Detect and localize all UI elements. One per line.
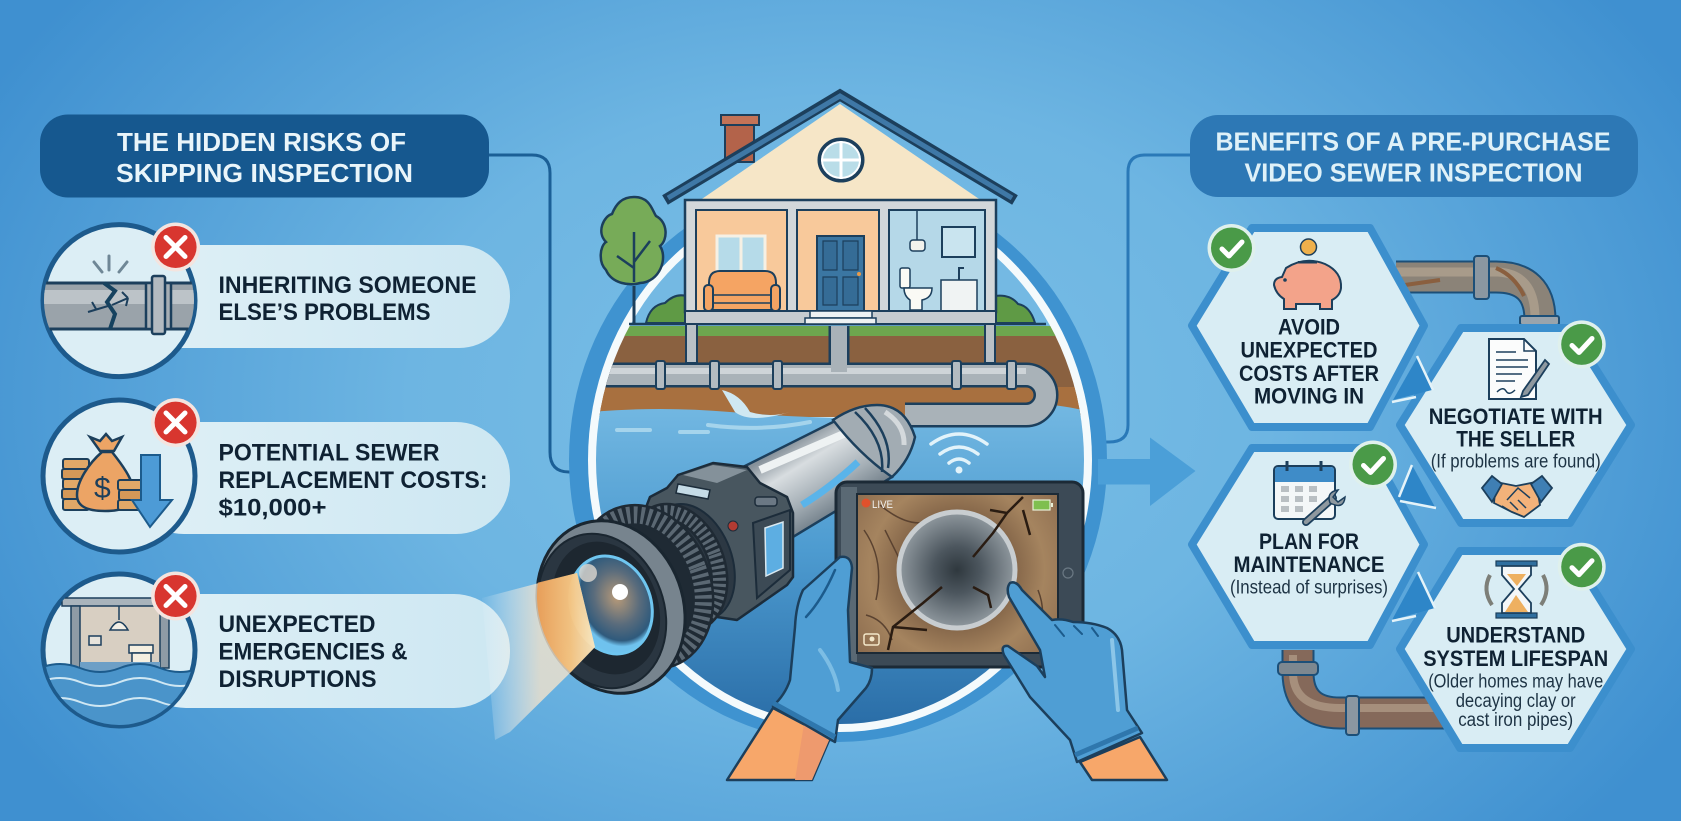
icon: red x badge bbox=[151, 398, 200, 447]
camera body bbox=[645, 463, 793, 620]
text: lifespan: (Older homes may have bbox=[1428, 672, 1603, 692]
icon: signed document bbox=[1489, 339, 1549, 399]
check badge bbox=[1558, 543, 1606, 591]
text: replacement costs bbox=[218, 440, 488, 522]
heading: hidden risks bbox=[40, 114, 489, 198]
rusty pipe: bottom bbox=[1278, 650, 1445, 735]
pipe interior bbox=[888, 497, 1030, 650]
text: inheriting problems: INHERITING SOMEONE bbox=[218, 272, 476, 299]
text: avoid costs: AVOID bbox=[1278, 314, 1340, 340]
text: plan maintenance: MAINTENANCE bbox=[1234, 552, 1384, 577]
icon: money bag and arrow bbox=[43, 400, 195, 552]
text: emergencies: EMERGENCIES & bbox=[218, 638, 408, 666]
arrow: negotiate to plan bbox=[1398, 465, 1436, 508]
ring bbox=[569, 178, 1107, 742]
text: plan maintenance bbox=[1230, 529, 1388, 598]
foundation posts bbox=[686, 324, 995, 363]
icon: cracked pipe bbox=[40, 225, 198, 377]
icon: money bag and arrow: $ bbox=[94, 472, 111, 505]
benefit: plan maintenance bbox=[1192, 440, 1424, 645]
text: avoid costs: MOVING IN bbox=[1254, 384, 1364, 408]
text: negotiate: (If problems are found) bbox=[1431, 452, 1601, 472]
sewer pipe bbox=[590, 326, 1046, 415]
ground line bbox=[629, 323, 1046, 325]
text: lifespan bbox=[1423, 622, 1608, 731]
text: negotiate: NEGOTIATE WITH bbox=[1429, 404, 1603, 429]
round window bbox=[820, 140, 862, 180]
arrow: to benefits bbox=[1098, 438, 1196, 506]
text: plan maintenance: (Instead of surprises) bbox=[1230, 578, 1388, 598]
left gloved hand bbox=[727, 557, 872, 780]
benefit: avoid costs bbox=[1192, 224, 1424, 427]
text: emergencies: UNEXPECTED bbox=[218, 611, 376, 638]
live indicator bbox=[862, 498, 893, 511]
text: avoid costs: COSTS AFTER bbox=[1239, 361, 1379, 386]
text: lifespan: UNDERSTAND bbox=[1446, 622, 1585, 648]
benefit: negotiate bbox=[1400, 320, 1631, 523]
text: avoid costs: UNEXPECTED bbox=[1240, 338, 1378, 362]
lens barrel bbox=[567, 492, 750, 676]
live indicator: LIVE bbox=[872, 499, 893, 511]
central illustration bbox=[513, 95, 1167, 780]
connector: centre to benefits header bbox=[1098, 155, 1190, 442]
text: replacement costs: REPLACEMENT COSTS: bbox=[218, 467, 488, 494]
panel: hidden risks bbox=[40, 114, 510, 730]
house bbox=[665, 95, 1015, 363]
text: plan maintenance: PLAN FOR bbox=[1259, 529, 1359, 554]
heading: benefits: BENEFITS OF A PRE-PURCHASE bbox=[1216, 126, 1610, 156]
text: lifespan: decaying clay or bbox=[1456, 691, 1576, 712]
check badge bbox=[1208, 224, 1256, 272]
text: replacement costs: POTENTIAL SEWER bbox=[218, 440, 440, 466]
text: lifespan: cast iron pipes) bbox=[1458, 710, 1573, 731]
room: entry door bbox=[797, 210, 879, 311]
risk item: replacement costs bbox=[43, 398, 510, 552]
tablet bbox=[836, 482, 1083, 667]
ground cross-section bbox=[596, 257, 1084, 724]
bushes bbox=[646, 295, 1035, 323]
room: living room bbox=[696, 210, 787, 311]
text: replacement costs: $10,000+ bbox=[218, 494, 326, 522]
text: inheriting problems bbox=[218, 272, 476, 326]
icon: flooded room bbox=[40, 574, 200, 730]
rusty pipe: top bbox=[1396, 256, 1559, 325]
panel: benefits bbox=[1190, 115, 1638, 748]
camera button bbox=[864, 634, 879, 645]
camera tube bbox=[745, 405, 915, 537]
icon: calendar and wrench bbox=[1274, 461, 1345, 522]
right gloved hand bbox=[1003, 582, 1167, 780]
check badge bbox=[1558, 320, 1606, 368]
lens front bbox=[513, 500, 709, 714]
light beam bbox=[482, 573, 595, 740]
walls bbox=[685, 200, 996, 312]
wifi icon bbox=[931, 434, 987, 474]
text: emergencies bbox=[218, 611, 408, 693]
benefit: lifespan bbox=[1400, 543, 1631, 748]
connector: risks header to centre bbox=[489, 155, 575, 472]
check badge bbox=[1349, 440, 1397, 488]
icon: red x badge bbox=[151, 572, 200, 620]
icon: hourglass bbox=[1486, 561, 1547, 618]
tree bbox=[601, 197, 666, 323]
floor slab bbox=[685, 311, 996, 324]
arrow: plan to lifespan bbox=[1392, 572, 1435, 621]
roof bbox=[665, 95, 1015, 200]
text: inheriting problems: ELSE’S PROBLEMS bbox=[218, 299, 430, 326]
arrow: costs to negotiate bbox=[1392, 356, 1433, 402]
battery indicator bbox=[1033, 500, 1053, 510]
heading: benefits: VIDEO SEWER INSPECTION bbox=[1244, 158, 1582, 188]
risk item: emergencies bbox=[40, 572, 510, 730]
icon: piggy bank bbox=[1274, 239, 1341, 309]
room: bathroom bbox=[889, 210, 985, 311]
text: negotiate bbox=[1429, 404, 1603, 472]
chimney bbox=[721, 115, 759, 162]
text: negotiate: THE SELLER bbox=[1456, 426, 1575, 452]
icon: red x badge bbox=[151, 222, 200, 272]
gable bbox=[696, 104, 985, 203]
text: avoid costs bbox=[1239, 314, 1379, 408]
text: emergencies: DISRUPTIONS bbox=[218, 666, 376, 693]
text: lifespan: SYSTEM LIFESPAN bbox=[1423, 646, 1608, 671]
home button bbox=[1063, 568, 1073, 578]
heading: hidden risks: SKIPPING INSPECTION bbox=[116, 158, 413, 188]
heading: benefits bbox=[1190, 115, 1638, 197]
heading: hidden risks: THE HIDDEN RISKS OF bbox=[117, 127, 406, 157]
icon: handshake bbox=[1482, 476, 1552, 517]
risk item: inheriting problems bbox=[40, 222, 510, 377]
